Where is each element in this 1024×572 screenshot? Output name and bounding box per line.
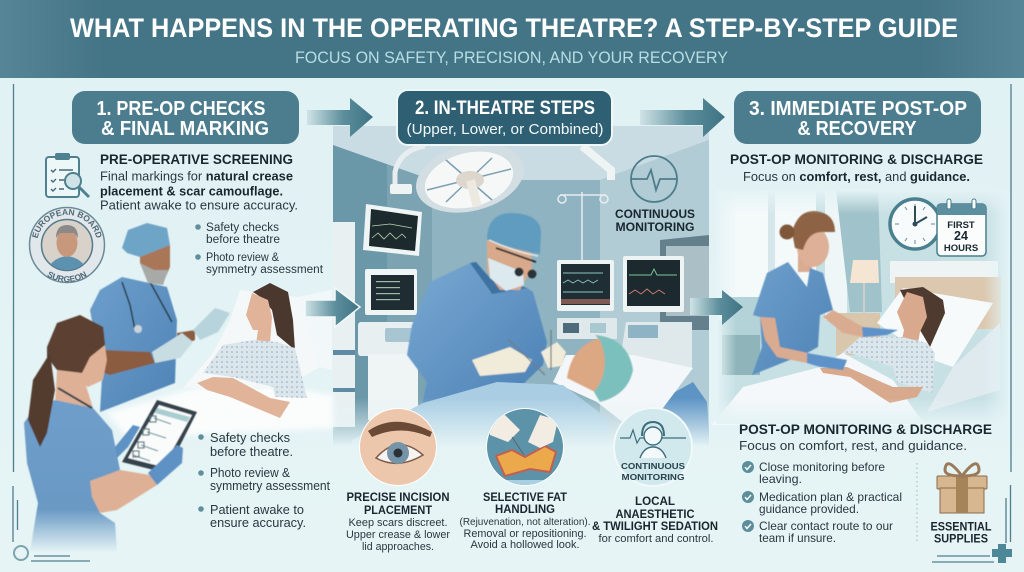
feature: selective fat handling: SELECTIVE FAT <box>483 490 568 504</box>
feature: local anaesthetic and twilight sedation: & TWILIGHT SEDATION <box>592 519 718 533</box>
left border ornament <box>13 84 90 561</box>
panel: centre operating-theatre scene <box>333 126 710 450</box>
patient gown <box>840 337 935 393</box>
patient arm <box>820 367 923 403</box>
right border ornament <box>932 84 1012 563</box>
bullets: lower pre-op list: Patient awake to <box>210 502 304 517</box>
post-op heading text <box>730 152 983 184</box>
patient face <box>246 293 272 344</box>
monitoring badge <box>614 408 692 486</box>
white and teal curtains <box>825 190 847 320</box>
right glove <box>148 445 183 485</box>
bullets: lower pre-op list: Photo review & <box>210 465 290 480</box>
patient gown <box>203 340 307 398</box>
feature: selective fat handling <box>460 407 590 551</box>
post-op discharge text <box>739 422 992 453</box>
monitor left upper <box>363 204 422 256</box>
ponytail <box>28 353 55 447</box>
label: continuous monitoring <box>615 209 695 234</box>
gloves <box>472 347 532 376</box>
sheet <box>712 353 925 425</box>
fat illustration <box>485 407 565 487</box>
pre-operative screening text: placement & scar camouflage. <box>100 184 283 198</box>
bullets: upper pre-op list: Photo review & <box>206 252 279 264</box>
tablet <box>122 400 197 473</box>
heading 1: pre-op checks: 1. PRE-OP CHECKS <box>96 98 266 120</box>
checklist: discharge points <box>742 460 902 545</box>
icon: essential supplies gift box <box>917 463 992 546</box>
heading 3: immediate post-op: & RECOVERY <box>798 118 917 140</box>
patient hair <box>253 283 295 350</box>
feature: selective fat handling: (Rejuvenation, not alteration). <box>460 516 590 528</box>
bullets: upper pre-op list: symmetry assessment <box>206 264 324 276</box>
feature: precise incision placement: Upper crease & lower <box>346 529 450 541</box>
panel: right recovery scene <box>712 190 1010 425</box>
post-op heading text: POST-OP MONITORING & DISCHARGE <box>730 152 983 167</box>
bullets: lower pre-op list: before theatre. <box>210 444 293 459</box>
face <box>78 343 107 387</box>
checklist: discharge points: Clear contact route to our <box>759 519 893 533</box>
icon: essential supplies gift box: ESSENTIAL <box>930 522 992 534</box>
pre-operative screening text: Final markings for natural crease <box>100 168 293 184</box>
wall panel <box>890 261 998 283</box>
label: continuous monitoring: MONITORING <box>616 222 695 234</box>
monitoring badge: MONITORING <box>622 472 685 482</box>
blue drape right <box>662 382 709 442</box>
bullets: lower pre-op list: ensure accuracy. <box>210 515 306 530</box>
feature: selective fat handling: Avoid a hollowed look. <box>470 539 580 551</box>
pre-operative screening text <box>100 152 298 212</box>
headboard <box>895 277 1001 329</box>
heading 3: immediate post-op <box>734 91 981 144</box>
iv pole <box>558 192 608 262</box>
mattress <box>927 323 1000 412</box>
monitor right b <box>620 256 692 370</box>
feature: precise incision placement <box>346 407 450 553</box>
feature: local anaesthetic and twilight sedation: LOCAL <box>635 494 675 508</box>
window <box>718 190 816 320</box>
left glove <box>115 425 140 458</box>
nurse <box>752 211 898 375</box>
patient face <box>897 292 927 342</box>
pillow <box>877 288 993 367</box>
subtitle: FOCUS ON SAFETY, PRECISION, AND YOUR RECOVERY <box>295 48 728 67</box>
patient head <box>567 335 633 402</box>
heading 1: pre-op checks: & FINAL MARKING <box>101 118 269 140</box>
monitor left lower <box>365 269 417 315</box>
checklist: discharge points: Close monitoring before <box>759 460 885 474</box>
bullets: upper pre-op list <box>195 222 324 276</box>
hair <box>47 315 105 373</box>
pre-operative screening text: Patient awake to ensure accuracy. <box>100 198 298 212</box>
icon: calendar first 24 hours: FIRST <box>947 220 975 231</box>
arrow: centre scene to right scene <box>690 290 743 325</box>
checklist: discharge points: leaving. <box>759 472 802 486</box>
icon: calendar first 24 hours: 24 <box>954 229 968 243</box>
anaesthesia machine <box>358 322 418 420</box>
bullets: lower pre-op list: symmetry assessment <box>210 478 330 493</box>
left cabinet <box>333 222 355 427</box>
arrow: step 1 to step 2 <box>307 98 373 137</box>
arrow: step 2 to step 3 <box>640 98 725 137</box>
bullets: lower pre-op list: Safety checks <box>210 430 290 445</box>
patient hair <box>900 287 945 347</box>
nurse <box>24 315 197 552</box>
lamp <box>836 260 880 355</box>
bullets: upper pre-op list: Safety checks <box>206 222 279 234</box>
patient arm <box>197 377 290 418</box>
icon: clock <box>890 199 940 249</box>
mask <box>488 258 524 291</box>
title: WHAT HAPPENS IN THE OPERATING THEATRE? A STEP-BY-STEP GUIDE <box>70 13 958 43</box>
back right window <box>660 235 709 330</box>
icon: calendar first 24 hours <box>937 199 986 256</box>
checklist: discharge points: guidance provided. <box>759 502 859 516</box>
arrow: left scene to centre scene <box>305 288 360 327</box>
cap <box>487 213 541 254</box>
feature: precise incision placement: lid approaches. <box>362 541 434 553</box>
feature: precise incision placement: PLACEMENT <box>364 503 433 517</box>
feature: precise incision placement: PRECISE INCISION <box>346 490 450 504</box>
doctor cap <box>122 223 170 257</box>
ceiling <box>333 126 709 180</box>
loupes <box>496 248 536 262</box>
armchair <box>722 297 770 360</box>
icon: essential supplies gift box: SUPPLIES <box>934 534 988 546</box>
gown <box>407 263 547 405</box>
surgical light <box>390 146 615 213</box>
post-op discharge text: POST-OP MONITORING & DISCHARGE <box>739 422 992 437</box>
eye illustration <box>358 407 438 487</box>
walls <box>432 140 709 413</box>
post-op heading text: Focus on comfort, rest, and guidance. <box>743 169 970 184</box>
feature: local anaesthetic and twilight sedation <box>592 408 718 545</box>
doctor <box>90 223 230 412</box>
badge: European Board surgeon <box>28 206 106 284</box>
badge: European Board surgeon: EUROPEAN BOARD <box>32 209 102 238</box>
checklist: discharge points: team if unsure. <box>759 531 836 545</box>
monitoring badge: CONTINUOUS <box>621 461 685 471</box>
monitor right a <box>557 260 617 339</box>
bed sheet <box>107 380 333 440</box>
heading 3: immediate post-op: 3. IMMEDIATE POST-OP <box>749 98 967 120</box>
surgeon <box>407 213 566 405</box>
badge: European Board surgeon: SURGEON <box>48 271 87 282</box>
header band <box>0 0 1024 78</box>
doctor face <box>140 245 170 283</box>
feature: precise incision placement: Keep scars discreet. <box>348 517 448 529</box>
pre-operative screening text: PRE-OPERATIVE SCREENING <box>100 152 293 167</box>
heading 1: pre-op checks <box>72 91 299 144</box>
feature: local anaesthetic and twilight sedation: ANAESTHETIC <box>616 507 695 521</box>
head <box>487 238 532 290</box>
feature: selective fat handling: Removal or repositioning. <box>464 528 586 540</box>
icon: continuous monitoring pulse <box>631 156 677 202</box>
label: continuous monitoring: CONTINUOUS <box>615 209 695 221</box>
panel: left pre-op scene <box>24 223 333 552</box>
heading 2: in-theatre steps <box>397 90 612 145</box>
bullets: upper pre-op list: before theatre <box>206 234 280 246</box>
heading 2: in-theatre steps: (Upper, Lower, or Combined) <box>406 121 604 138</box>
feature: local anaesthetic and twilight sedation: for comfort and control. <box>598 533 714 545</box>
heading 2: in-theatre steps: 2. IN-THEATRE STEPS <box>415 97 595 119</box>
blue drape <box>353 382 606 440</box>
checklist: discharge points: Medication plan & practical <box>759 490 902 504</box>
bullets: lower pre-op list <box>198 430 330 530</box>
post-op discharge text: Focus on comfort, rest, and guidance. <box>739 438 967 453</box>
pillow <box>553 355 693 428</box>
pillow <box>183 290 320 390</box>
icon: calendar first 24 hours: HOURS <box>944 243 978 254</box>
icon: clipboard with magnifier <box>46 153 89 197</box>
feature: selective fat handling: HANDLING <box>495 502 555 516</box>
